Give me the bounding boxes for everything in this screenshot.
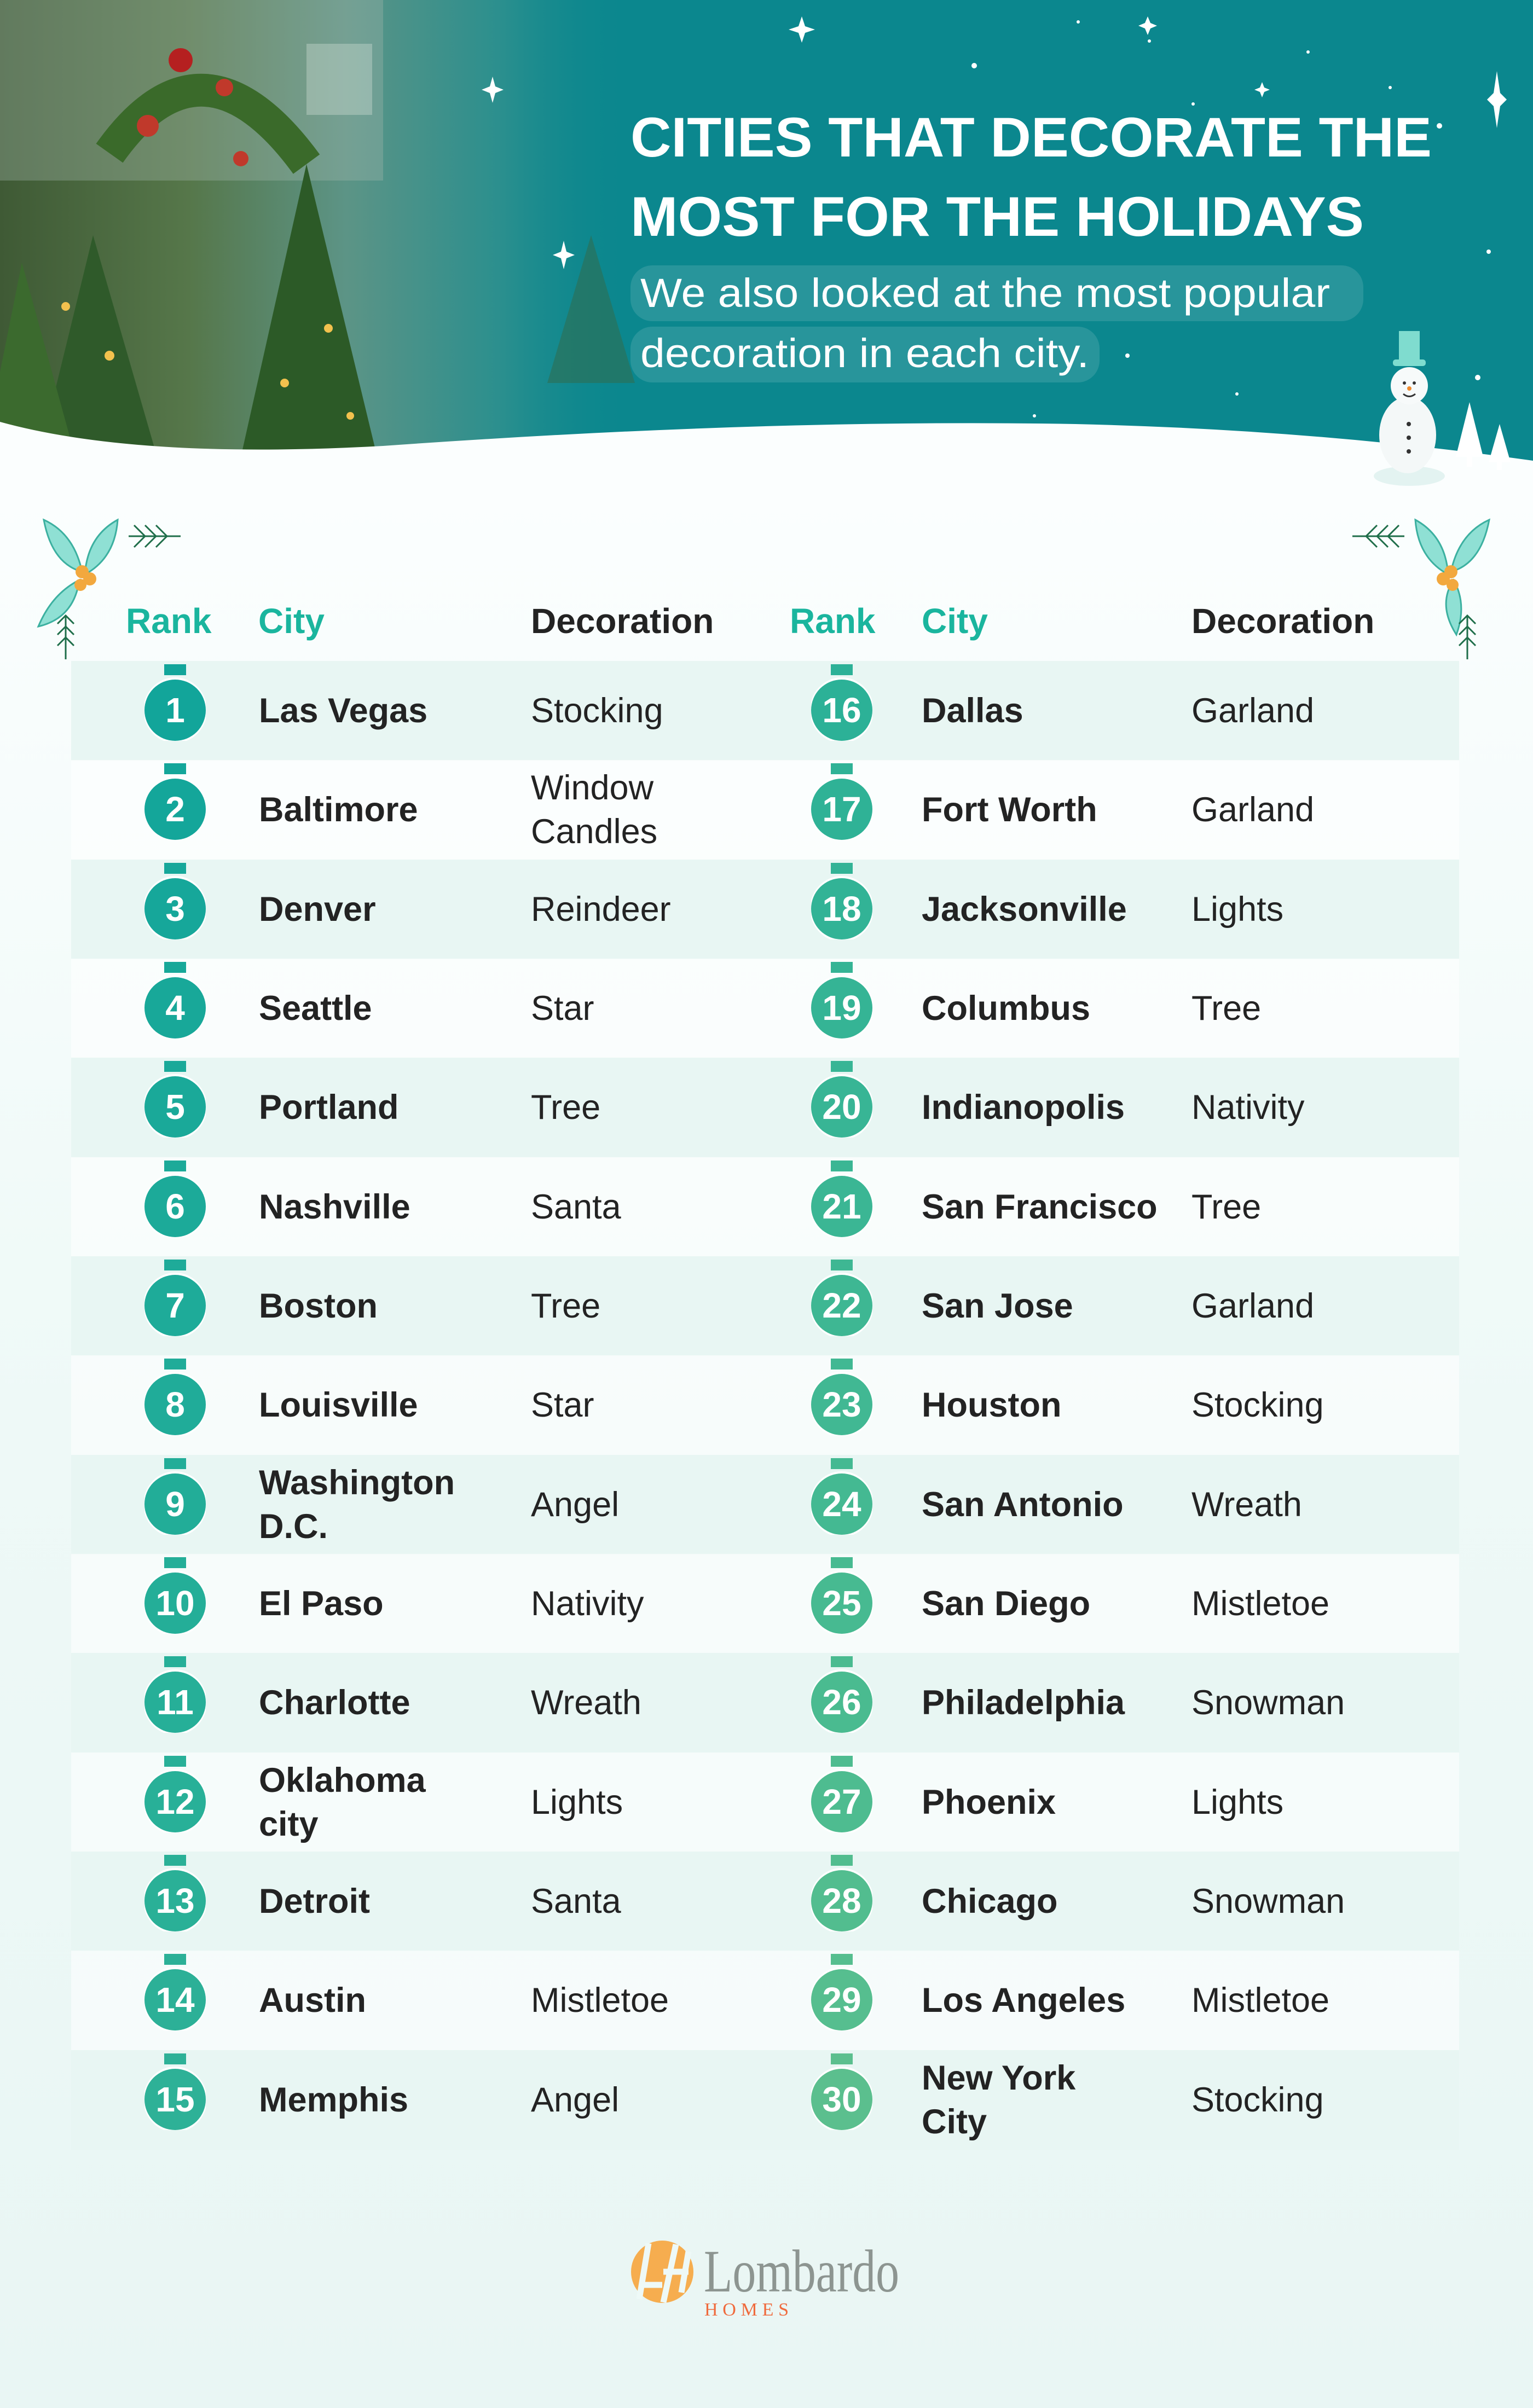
row 8: Star	[531, 1386, 594, 1424]
row 3: Denver	[259, 890, 376, 929]
row 14: 29	[822, 1980, 861, 2020]
row 3: 18	[822, 889, 861, 929]
table header: City	[258, 601, 325, 641]
row 2: Window	[531, 769, 653, 807]
row 10	[71, 1554, 1459, 1653]
row 7: 22	[822, 1286, 861, 1325]
row 4: Star	[531, 989, 594, 1028]
row 2: Fort Worth	[922, 791, 1097, 829]
row 5	[71, 1058, 1459, 1157]
row 14: Mistletoe	[531, 1981, 669, 2020]
title: MOST FOR THE HOLIDAYS	[630, 185, 1364, 246]
row 1: Las Vegas	[259, 692, 427, 730]
row 14	[71, 1951, 1459, 2050]
title: CITIES THAT DECORATE THE	[630, 106, 1432, 169]
row 13	[71, 1852, 1459, 1951]
row 2	[71, 760, 1459, 860]
row 3: Lights	[1191, 890, 1283, 929]
row 3: 3	[165, 889, 185, 929]
row 9	[71, 1455, 1459, 1554]
title	[630, 106, 1432, 246]
row 15: Angel	[531, 2081, 619, 2119]
icon: holly left	[37, 518, 181, 659]
row 15: City	[922, 2103, 987, 2141]
logo: Lombardo Homes	[631, 2238, 899, 2320]
row 2: 2	[165, 790, 185, 829]
row 10: Nativity	[531, 1585, 644, 1623]
row 15: New York	[922, 2059, 1075, 2097]
icon: snowman and trees	[1374, 331, 1509, 486]
row 2: Garland	[1191, 791, 1314, 829]
row 10: Mistletoe	[1191, 1585, 1329, 1623]
row 12: Lights	[1191, 1783, 1283, 1821]
row 11: Philadelphia	[922, 1684, 1125, 1722]
row 9: 24	[822, 1484, 861, 1524]
row 3: Reindeer	[531, 890, 671, 929]
row 7: Garland	[1191, 1287, 1314, 1325]
row 12: city	[259, 1805, 319, 1843]
row 8: 23	[822, 1385, 861, 1424]
row 14: Los Angeles	[922, 1981, 1125, 2020]
icon: holly right	[1352, 518, 1490, 659]
row 12: Phoenix	[922, 1783, 1056, 1821]
row 2: Candles	[531, 813, 657, 851]
row 14: Austin	[259, 1981, 366, 2020]
row 5: Nativity	[1191, 1088, 1305, 1127]
table header: Rank	[126, 601, 211, 641]
row 6: 21	[822, 1187, 861, 1226]
row 7: Tree	[531, 1287, 600, 1325]
row 6: San Francisco	[922, 1188, 1158, 1226]
row 8: Stocking	[1191, 1386, 1324, 1424]
subtitle	[630, 265, 1363, 382]
row 4: Seattle	[259, 989, 372, 1028]
row 12: 27	[822, 1782, 861, 1821]
row 1: Stocking	[531, 692, 663, 730]
subtitle: We also looked at the most popular	[640, 270, 1330, 316]
row 4: 4	[165, 988, 185, 1028]
row 13: Santa	[531, 1882, 621, 1920]
row 9: Angel	[531, 1486, 619, 1524]
row 14: 14	[155, 1980, 195, 2020]
table header: Rank	[790, 601, 876, 641]
row 4: 19	[822, 988, 861, 1028]
row 8: Houston	[922, 1386, 1061, 1424]
row 12: Oklahoma	[259, 1761, 426, 1800]
row 5: Portland	[259, 1088, 399, 1127]
row 11	[71, 1653, 1459, 1753]
row 9: Washington	[259, 1464, 455, 1502]
row 1: Garland	[1191, 692, 1314, 730]
row 10: 10	[155, 1583, 195, 1623]
row 7	[71, 1256, 1459, 1356]
row 10: El Paso	[259, 1585, 384, 1623]
row 1: 16	[822, 691, 861, 730]
table header: Decoration	[1191, 601, 1374, 641]
row 4	[71, 959, 1459, 1058]
table header	[126, 601, 1374, 641]
row 13: Detroit	[259, 1882, 370, 1920]
row 2: Baltimore	[259, 791, 418, 829]
row 4: Tree	[1191, 989, 1261, 1028]
row 9: D.C.	[259, 1507, 328, 1546]
row 3: Jacksonville	[922, 890, 1127, 929]
row 6: Tree	[1191, 1188, 1261, 1226]
row 7: San Jose	[922, 1287, 1073, 1325]
row 6: Nashville	[259, 1188, 410, 1226]
subtitle: decoration in each city.	[640, 330, 1089, 376]
row 8	[71, 1355, 1459, 1455]
row 1: Dallas	[922, 692, 1023, 730]
row 8: 8	[165, 1385, 185, 1424]
row 14: Mistletoe	[1191, 1981, 1329, 2020]
row 15: 30	[822, 2080, 861, 2119]
header banner	[0, 0, 1533, 461]
row 12: 12	[155, 1782, 195, 1821]
row 1: 1	[165, 691, 185, 730]
row 13: Snowman	[1191, 1882, 1345, 1920]
row 2: 17	[822, 790, 861, 829]
row 5: 20	[822, 1087, 861, 1127]
row 11: Charlotte	[259, 1684, 410, 1722]
row 4: Columbus	[922, 989, 1090, 1028]
row 7: 7	[165, 1286, 185, 1325]
row 9: 9	[165, 1484, 185, 1524]
row 5: 5	[165, 1087, 185, 1127]
row 11: 26	[822, 1682, 861, 1722]
row 10: San Diego	[922, 1585, 1090, 1623]
row 10: 25	[822, 1583, 861, 1623]
row 6: Santa	[531, 1188, 621, 1226]
row 15: Stocking	[1191, 2081, 1324, 2119]
row 1	[71, 661, 1459, 761]
table header: City	[922, 601, 988, 641]
row 13: 13	[155, 1881, 195, 1920]
row 5: Tree	[531, 1088, 600, 1127]
row 9: San Antonio	[922, 1486, 1124, 1524]
table header: Decoration	[531, 601, 714, 641]
row 15: 15	[155, 2080, 195, 2119]
row 12	[71, 1753, 1459, 1852]
row 15	[71, 2050, 1459, 2150]
row 15: Memphis	[259, 2081, 408, 2119]
row 6	[71, 1157, 1459, 1257]
row 12: Lights	[531, 1783, 623, 1821]
row 11: Snowman	[1191, 1684, 1345, 1722]
row 11: Wreath	[531, 1684, 641, 1722]
row 9: Wreath	[1191, 1486, 1302, 1524]
row 3	[71, 860, 1459, 959]
row 8: Louisville	[259, 1386, 418, 1424]
row 7: Boston	[259, 1287, 378, 1325]
row 5: Indianopolis	[922, 1088, 1125, 1127]
row 13: 28	[822, 1881, 861, 1920]
row 11: 11	[157, 1682, 194, 1722]
row 6: 6	[165, 1187, 185, 1226]
logo: Lombardo Homes: HOMES	[704, 2300, 789, 2320]
row 13: Chicago	[922, 1882, 1058, 1920]
